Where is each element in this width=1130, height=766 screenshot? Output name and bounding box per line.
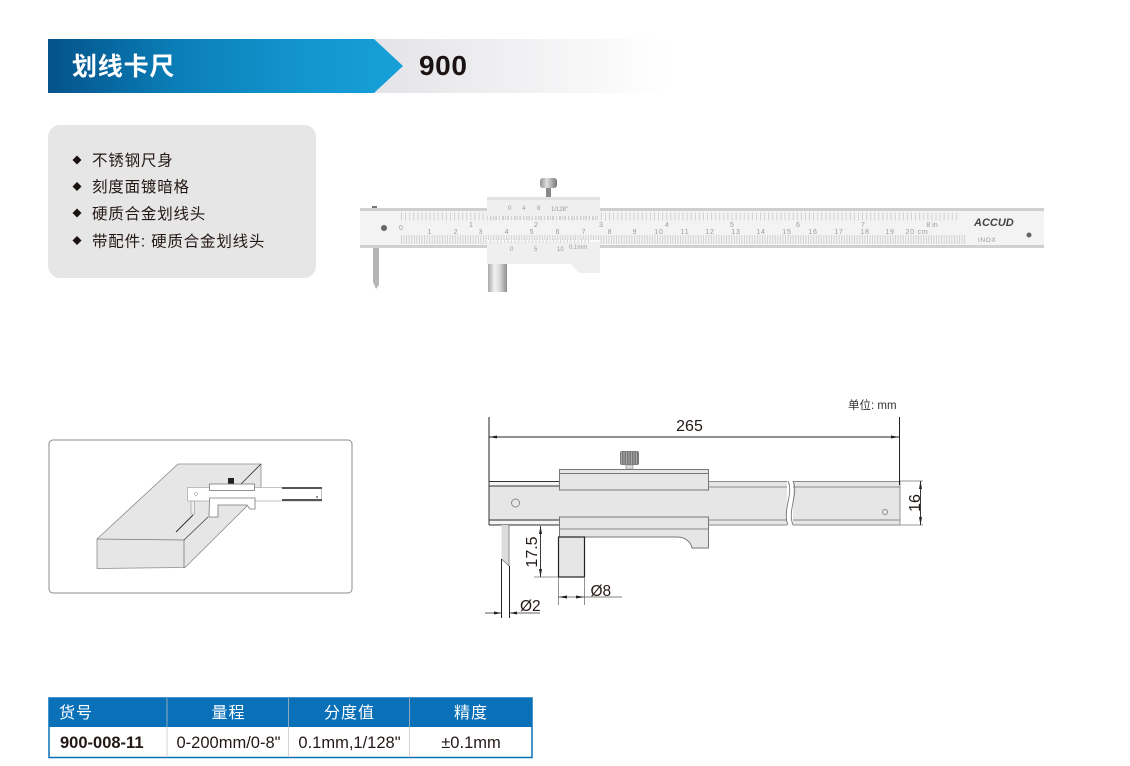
metric scale numbers: 18 (860, 229, 870, 236)
table header: 量程 (211, 704, 246, 722)
metric scale numbers: 11 (681, 229, 689, 236)
metric scale numbers: 8 (608, 229, 612, 236)
mounting holes (381, 225, 387, 231)
table row: 0.1mm,1/128" (298, 734, 401, 752)
metric scale ticks (401, 235, 966, 244)
INOX mark: INOX (978, 237, 996, 244)
metric scale numbers: 12 (705, 229, 715, 236)
feature 4: 带配件: 硬质合金划线头 (92, 232, 265, 250)
unit note: 单位: mm (848, 398, 897, 412)
upper slider block (487, 198, 600, 216)
lower vernier labels: 5 (534, 247, 538, 253)
specification table (49, 698, 532, 758)
dimension: 16 (900, 481, 924, 525)
inch scale numbers: 4 (665, 222, 669, 229)
lower slider (209, 498, 255, 517)
upper vernier labels: 4 (522, 206, 526, 212)
inch scale numbers: 5 (730, 222, 734, 229)
scribed line (176, 515, 193, 532)
inch scale numbers: 7 (861, 222, 865, 229)
model number: 900 (419, 50, 468, 81)
thumb screw (620, 451, 639, 469)
cylinder foot (488, 264, 507, 292)
upper slider (560, 470, 708, 490)
table header: 分度值 (324, 704, 375, 722)
dimension: 17.5 (524, 526, 558, 577)
metric scale numbers: 7 (582, 229, 586, 236)
metric scale numbers: 9 (633, 229, 637, 236)
inch scale numbers (399, 222, 938, 232)
metric scale numbers: 6 (556, 229, 560, 236)
panel: features (48, 125, 316, 278)
inch scale numbers: 6 (796, 222, 800, 229)
scriber (191, 501, 194, 514)
upper slider (210, 484, 254, 490)
lower slider block (487, 240, 600, 273)
metric scale numbers: 19 (885, 229, 895, 236)
dimension: 17.5: 17.5 (524, 536, 541, 568)
dimension: diameter 8 (558, 577, 622, 605)
caliper in use (188, 478, 322, 517)
inch scale numbers: 8 in (926, 222, 938, 229)
dimension: diameter 8: Ø8 (590, 583, 611, 600)
inch scale numbers: 2 (534, 222, 538, 229)
dimension: 265: 265 (676, 418, 703, 435)
lower vernier labels: 0.1mm (569, 245, 587, 251)
metric scale numbers: 15 (782, 229, 792, 236)
upper vernier labels: 1/128" (551, 207, 568, 213)
metric scale numbers: 13 (731, 229, 741, 236)
feature 3: 硬质合金划线头 (92, 205, 206, 223)
table row (60, 727, 501, 757)
ruler beam (360, 208, 1044, 248)
metric scale numbers: 10 (654, 229, 664, 236)
inch scale numbers: 0 (399, 225, 403, 232)
dimension: 16: 16 (907, 494, 924, 512)
metric scale numbers: 4 (505, 229, 509, 236)
table row: ±0.1mm (441, 734, 501, 752)
upper vernier labels: 0 (508, 206, 512, 212)
title: 划线卡尺 (72, 53, 175, 81)
metric scale numbers: 14 (756, 229, 766, 236)
metric scale numbers: 20 cm (905, 229, 929, 236)
bar body (489, 480, 900, 526)
brand logo: ACCUD (973, 217, 1014, 229)
rear pin (372, 206, 377, 209)
product photo: marking caliper (360, 178, 1044, 292)
feature 2: 刻度面镀暗格 (92, 178, 190, 196)
break marks (787, 480, 793, 526)
inch scale numbers: 1 (469, 222, 473, 229)
beam (188, 488, 322, 501)
metric scale numbers: 3 (479, 229, 483, 236)
lower vernier labels: 0 (510, 247, 514, 253)
scriber pin (502, 525, 510, 618)
panel: usage illustration (49, 440, 352, 593)
metric scale numbers: 1 (428, 229, 432, 236)
thumb screw (546, 187, 551, 198)
table header: 精度 (454, 704, 488, 722)
workpiece block (97, 464, 261, 568)
cylinder foot (558, 537, 584, 577)
metric scale numbers: 2 (454, 229, 458, 236)
metric scale numbers (428, 229, 929, 236)
inch scale ticks (401, 212, 958, 220)
dimension: diameter 2 (485, 598, 541, 615)
scriber pin (373, 248, 379, 289)
metric scale numbers: 17 (834, 229, 844, 236)
metric scale numbers: 16 (808, 229, 818, 236)
lower vernier labels (510, 245, 587, 253)
dimension: 265 (489, 417, 900, 485)
metric scale numbers: 5 (530, 229, 534, 236)
table header (49, 698, 532, 727)
dimension: diameter 2: Ø2 (520, 598, 541, 615)
table header: 货号 (59, 704, 93, 722)
upper vernier labels: 8 (537, 206, 541, 212)
table row: 900-008-11 (60, 734, 144, 752)
knob (228, 478, 234, 484)
banner grey tail (374, 39, 670, 93)
upper vernier labels (508, 206, 568, 213)
banner blue arrow (48, 39, 403, 93)
technical drawing (485, 398, 924, 618)
lower slider (560, 517, 708, 548)
title banner (48, 39, 670, 93)
holes (512, 499, 520, 507)
feature 1: 不锈钢尺身 (92, 152, 174, 170)
lower vernier labels: 10 (557, 247, 564, 253)
table row: 0-200mm/0-8" (177, 734, 281, 752)
inch scale numbers: 3 (599, 222, 603, 229)
